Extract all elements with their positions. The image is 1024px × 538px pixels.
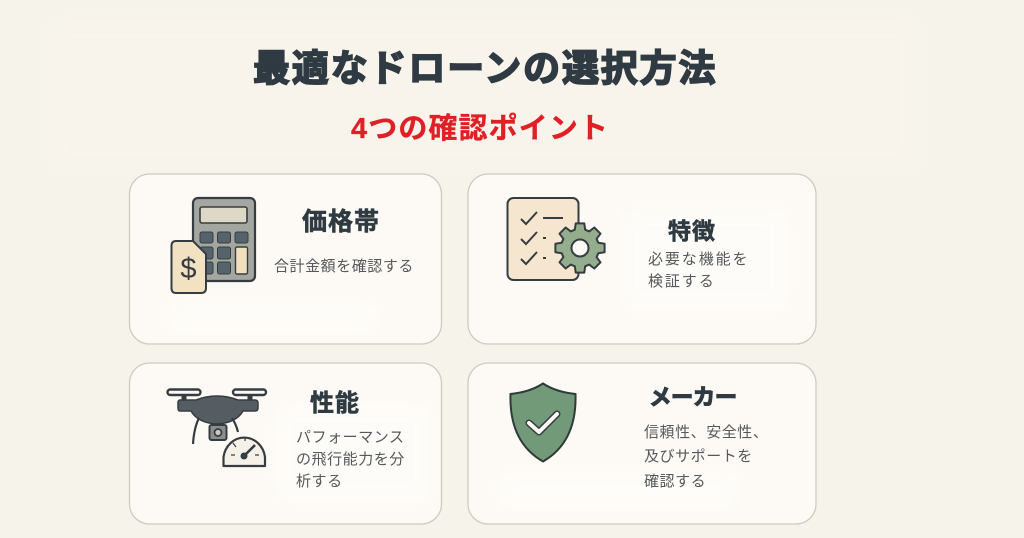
heading: performance: 性能 bbox=[310, 390, 360, 417]
text: manufacturer: 及びサポートを bbox=[644, 448, 753, 465]
title: 最適なドローンの選択方法 bbox=[253, 48, 717, 89]
icon: checklist and gear bbox=[508, 198, 605, 280]
panel: performance bbox=[130, 363, 442, 524]
text: performance: 析する bbox=[296, 473, 343, 490]
heading: price range: 価格帯 bbox=[302, 208, 380, 236]
panel: features bbox=[468, 174, 816, 344]
text: features: 必要な機能を bbox=[648, 251, 749, 268]
text: price range: 合計金額を確認する bbox=[274, 258, 414, 275]
text: features: 検証する bbox=[648, 273, 716, 290]
text: manufacturer: 信頼性、安全性、 bbox=[644, 424, 768, 441]
icon: calculator and price tag: $ bbox=[180, 253, 197, 285]
text: performance: パフォーマンス bbox=[296, 429, 405, 446]
text: manufacturer: 確認する bbox=[644, 473, 706, 490]
panel: price range bbox=[130, 174, 442, 344]
subtitle: 4つの確認ポイント bbox=[351, 112, 609, 145]
icon: drone and gauge bbox=[168, 390, 266, 466]
heading: features: 特徴 bbox=[668, 218, 716, 244]
heading: manufacturer: メーカー bbox=[649, 385, 737, 410]
text: performance: の飛行能力を分 bbox=[296, 451, 405, 468]
icon: calculator and price tag bbox=[172, 198, 255, 293]
icon: shield with check bbox=[510, 384, 576, 462]
panel: manufacturer bbox=[468, 363, 816, 524]
